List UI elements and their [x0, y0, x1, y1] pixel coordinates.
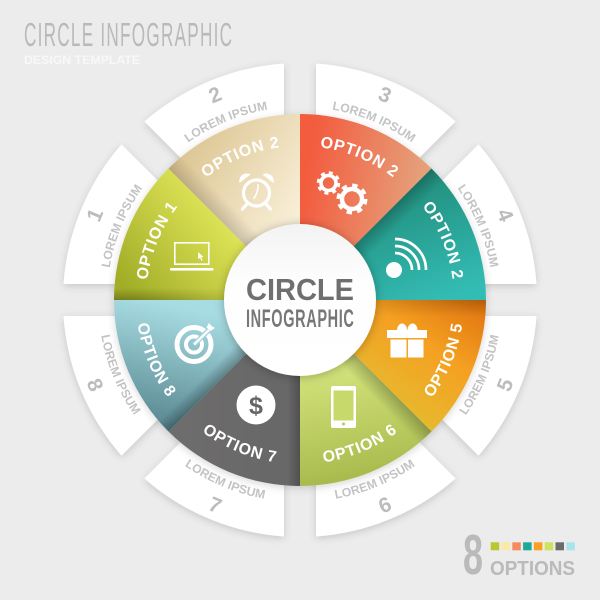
sector 1	[111, 168, 246, 302]
option 1 label: OPTION 1	[137, 202, 178, 279]
option labels	[137, 136, 463, 462]
sector 6	[300, 300, 432, 486]
label 8	[82, 334, 141, 414]
legend number: 8	[463, 523, 483, 587]
label 2	[184, 82, 267, 142]
label 7: 7	[205, 493, 225, 518]
label 4	[458, 184, 518, 267]
white segment 6	[316, 339, 456, 536]
outer white segments	[64, 64, 536, 536]
sector 2	[168, 114, 300, 300]
sector 5	[354, 300, 489, 434]
legend: 8 options	[463, 523, 575, 587]
outer segment labels	[82, 82, 519, 518]
label 1	[82, 184, 142, 268]
white segment 8	[64, 316, 261, 456]
label 6: 6	[375, 493, 395, 518]
option 6 label: OPTION 6	[323, 424, 396, 462]
label 1: LOREM IPSUM	[102, 184, 142, 268]
icon: gears	[318, 173, 366, 212]
label 2: LOREM IPSUM	[184, 102, 267, 142]
label 5: LOREM IPSUM	[459, 334, 499, 415]
color wheel	[114, 114, 486, 486]
sector 7	[168, 300, 300, 486]
icon: target	[177, 323, 215, 362]
option 2 label (teal): OPTION 2	[424, 202, 463, 279]
label 2: 2	[205, 82, 225, 108]
white segment 7	[144, 339, 284, 536]
icon: wifi signal	[386, 239, 426, 278]
white segment 1	[64, 144, 261, 284]
label 4: 4	[492, 205, 518, 225]
sector 3	[300, 114, 432, 300]
center circle	[224, 224, 376, 376]
label 1: 1	[82, 205, 108, 225]
sector 4	[300, 168, 486, 300]
label 7: LOREM IPSUM	[185, 459, 266, 498]
legend text: OPTIONS	[490, 557, 575, 580]
icon: laptop	[170, 243, 214, 271]
white segment 5	[339, 316, 536, 456]
icon: dollar coin	[236, 386, 276, 424]
sector 8	[114, 300, 300, 432]
label 8: LOREM IPSUM	[102, 334, 141, 414]
icon: gift box	[387, 324, 427, 358]
label 3: 3	[375, 82, 395, 108]
icon: smartphone	[331, 386, 356, 428]
white segment 4	[339, 144, 536, 284]
label 4: LOREM IPSUM	[458, 184, 498, 267]
label 3	[332, 82, 416, 142]
label 5	[459, 334, 519, 415]
label 6: LOREM IPSUM	[334, 459, 414, 498]
white segment 2	[144, 64, 284, 261]
icon: alarm clock	[239, 173, 274, 209]
subtitle: DESIGN TEMPLATE	[24, 53, 140, 67]
center heading: CIRCLE	[246, 272, 354, 307]
label 5: 5	[493, 375, 519, 395]
label 7	[185, 459, 266, 518]
label 8: 8	[82, 375, 107, 395]
label 6	[334, 459, 414, 518]
option 2 label (tan): OPTION 2	[202, 136, 279, 176]
option 5 label: OPTION 5	[424, 324, 462, 396]
icon: dollar coin: $	[249, 392, 263, 420]
white segment 3	[316, 64, 456, 261]
label 3: LOREM IPSUM	[332, 102, 416, 142]
option 2 label (red): OPTION 2	[321, 137, 398, 178]
option 7 label: OPTION 7	[204, 424, 277, 462]
center subheading: INFOGRAPHIC	[246, 306, 354, 333]
legend color swatches	[491, 542, 575, 550]
title: CIRCLE INFOGRAPHIC	[24, 16, 232, 54]
option 8 label: OPTION 8	[138, 323, 176, 396]
